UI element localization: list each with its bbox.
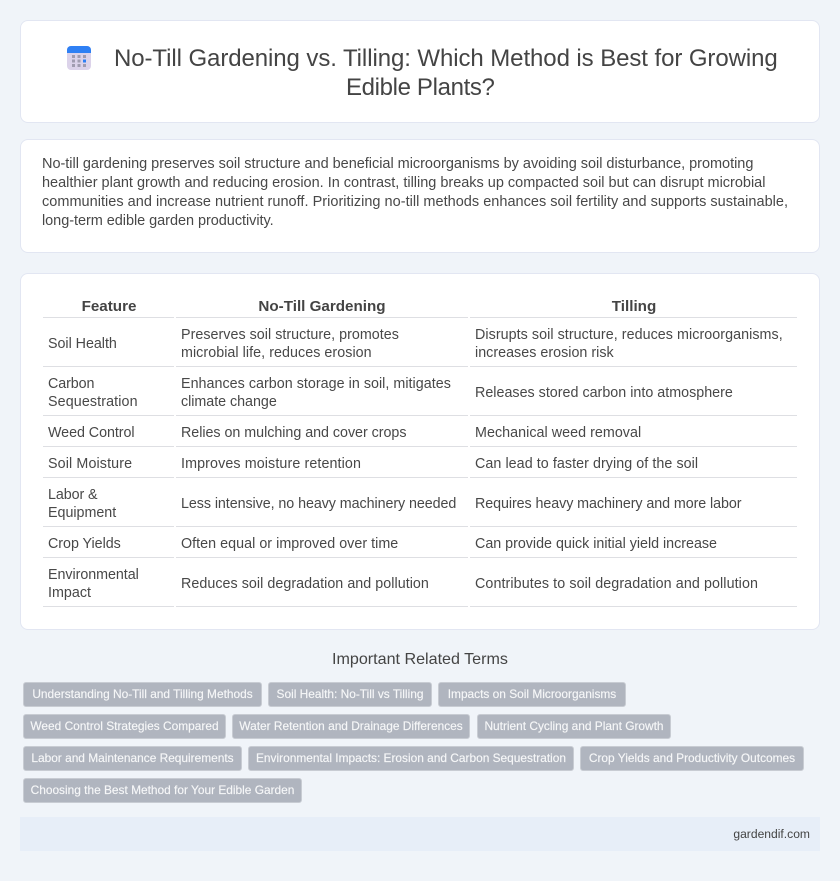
row: Carbon Sequestration: Sequestration (48, 394, 138, 410)
tag: Water Retention and Drainage Differences (239, 719, 463, 733)
related terms tags (23, 682, 804, 803)
title: Edible Plants? (346, 74, 495, 101)
tag: Environmental Impacts: Erosion and Carbon Sequestration (256, 751, 566, 765)
no-till: Environmental Impact: Reduces soil degradation and pollution (181, 576, 429, 592)
footer source: gardendif.com (733, 827, 810, 841)
intro text: long-term edible garden productivity. (42, 213, 274, 229)
tag: Choosing the Best Method for Your Edible Garden (31, 783, 294, 797)
intro text: No-till gardening preserves soil structure and beneficial microorganisms by avoiding soil disturbance, promoting (42, 156, 753, 172)
tag (23, 714, 226, 739)
row: Environmental Impact (48, 567, 139, 601)
row: Weed Control: Weed Control (48, 425, 135, 441)
table header: No-Till Gardening: No-Till Gardening (258, 298, 386, 315)
tilling: Soil Health (475, 327, 783, 361)
tilling: Labor and Equipment: Requires heavy machinery and more labor (475, 496, 741, 512)
header panel (20, 20, 820, 123)
tag (248, 746, 574, 771)
title (114, 45, 778, 101)
tag: Soil Health: No-Till vs Tilling (277, 687, 423, 701)
no-till: Soil Health: Preserves soil structure, promotes (181, 327, 399, 343)
tag (23, 682, 262, 707)
tag: Crop Yields and Productivity Outcomes (589, 751, 795, 765)
no-till: Crop Yields: Often equal or improved over time (181, 536, 398, 552)
tag (477, 714, 671, 739)
tilling: Soil Health: Disrupts soil structure, reduces microorganisms, (475, 327, 783, 343)
table header: Feature: Feature (82, 298, 136, 315)
tilling: Crop Yields: Can provide quick initial yield increase (475, 536, 717, 552)
no-till: Soil Health: microbial life, reduces erosion (181, 345, 372, 361)
no-till: Carbon Sequestration (181, 376, 451, 410)
intro text: healthier plant growth and reducing erosion. In contrast, tilling breaks up compacted soil but can disrupt microbial (42, 175, 765, 191)
tag: Impacts on Soil Microorganisms (448, 687, 616, 701)
intro text: communities and increase nutrient runoff. Prioritizing no-till methods enhances soil fertility and supports sustainable, (42, 194, 788, 210)
tilling: Weed Control: Mechanical weed removal (475, 425, 641, 441)
row: Carbon Sequestration (48, 376, 138, 410)
tag (580, 746, 804, 771)
no-till: Soil Health (181, 327, 399, 361)
icon: calendar (67, 46, 91, 70)
tag (23, 746, 242, 771)
row: Crop Yields: Crop Yields (48, 536, 121, 552)
row: Labor and Equipment (48, 487, 116, 521)
row: Environmental Impact: Impact (48, 585, 91, 601)
no-till: Carbon Sequestration: climate change (181, 394, 277, 410)
tag (232, 714, 470, 739)
no-till: Soil Moisture: Improves moisture retention (181, 456, 361, 472)
tag (438, 682, 626, 707)
row: Labor and Equipment: Labor & (48, 487, 98, 503)
table header: Tilling: Tilling (612, 298, 656, 315)
tilling: Environmental Impact: Contributes to soil degradation and pollution (475, 576, 758, 592)
tag: Nutrient Cycling and Plant Growth (484, 719, 664, 733)
no-till: Carbon Sequestration: Enhances carbon storage in soil, mitigates (181, 376, 451, 392)
tilling: Soil Health: increases erosion risk (475, 345, 614, 361)
intro text (42, 156, 788, 229)
tilling: Soil Moisture: Can lead to faster drying of the soil (475, 456, 698, 472)
tag: Labor and Maintenance Requirements (31, 751, 234, 765)
row: Labor and Equipment: Equipment (48, 505, 116, 521)
no-till: Labor and Equipment: Less intensive, no heavy machinery needed (181, 496, 456, 512)
intro panel (20, 139, 820, 253)
row: Carbon Sequestration: Carbon (48, 376, 94, 392)
row: Soil Health: Soil Health (48, 336, 117, 352)
tag: Understanding No-Till and Tilling Methods (32, 687, 253, 701)
title: No-Till Gardening vs. Tilling: Which Method is Best for Growing (114, 45, 778, 72)
tag (23, 778, 302, 803)
related terms heading: Important Related Terms (332, 650, 508, 668)
row: Soil Moisture: Soil Moisture (48, 456, 132, 472)
no-till: Weed Control: Relies on mulching and cover crops (181, 425, 406, 441)
tag (268, 682, 432, 707)
tag: Weed Control Strategies Compared (30, 719, 219, 733)
comparison table panel (20, 273, 820, 630)
tilling: Carbon Sequestration: Releases stored carbon into atmosphere (475, 385, 733, 401)
footer bar (20, 817, 820, 851)
row: Environmental Impact: Environmental (48, 567, 139, 583)
